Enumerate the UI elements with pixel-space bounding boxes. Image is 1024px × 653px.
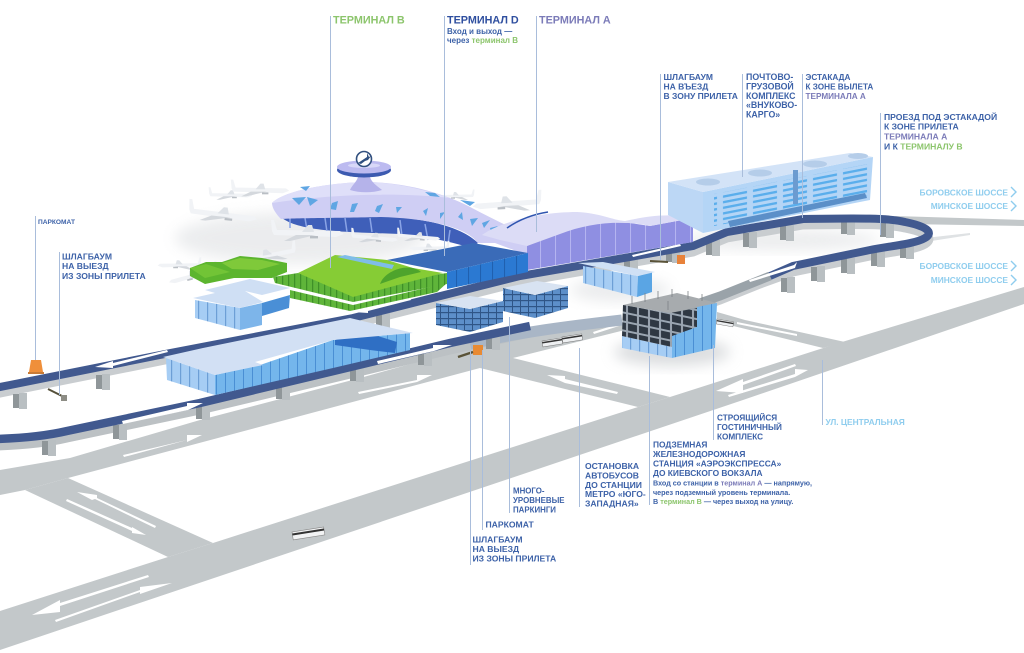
tower — [337, 160, 391, 192]
label: exit barrier bottom: ИЗ ЗОНЫ ПРИЛЕТА — [472, 554, 556, 564]
label: cargo complex: КОМПЛЕКС — [746, 91, 796, 101]
parking meter and barrier: near arrivals — [458, 345, 483, 357]
label: aeroexpress station: ЖЕЛЕЗНОДОРОЖНАЯ — [652, 449, 745, 459]
label: terminal D: Вход и выход — — [447, 27, 512, 36]
label: aeroexpress station — [652, 440, 812, 506]
label: multilevel parking: УРОВНЕВЫЕ — [513, 496, 565, 505]
label: terminal D — [447, 14, 519, 45]
label: departures overpass: К ЗОНЕ ВЫЛЕТА — [806, 82, 873, 92]
label: cargo complex: ПОЧТОВО- — [746, 72, 793, 82]
hotel under construction — [622, 289, 717, 358]
parking structures — [436, 281, 568, 332]
label: multilevel parking: ПАРКИНГИ — [513, 506, 556, 514]
label: terminal A: ТЕРМИНАЛ А — [539, 14, 611, 26]
label: bus stop: ОСТАНОВКА — [585, 461, 639, 471]
building: upper left pavilion — [193, 279, 290, 330]
label: highways lower: МИНСКОЕ ШОССЕ — [931, 275, 1008, 285]
barrier: left exit — [48, 389, 67, 401]
label: entry barrier: В ЗОНУ ПРИЛЕТА — [664, 91, 738, 101]
plane: apron aircraft group — [158, 180, 542, 287]
terminal D — [387, 243, 528, 289]
label: parking meter bottom: ПАРКОМАТ — [486, 520, 534, 530]
label: aeroexpress station: СТАНЦИЯ «АЭРОЭКСПРЕССА» — [653, 458, 782, 468]
label: cargo complex: «ВНУКОВО- — [746, 100, 797, 110]
label: hotel under construction: ГОСТИНИЧНЫЙ — [717, 421, 782, 432]
label: exit barrier left: НА ВЫЕЗД — [62, 261, 109, 271]
label: aeroexpress station: ПОДЗЕМНАЯ — [653, 440, 707, 450]
label: bus stop: ДО СТАНЦИИ — [585, 480, 642, 490]
label: aeroexpress station: через подземный уровень терминала. — [653, 488, 790, 497]
label: exit barrier bottom: НА ВЫЕЗД — [472, 544, 519, 554]
label: parking meter left: ПАРКОМАТ — [38, 219, 75, 226]
label: aeroexpress station: Вход со станции в терминал А — напрямую, — [653, 478, 812, 488]
label: bus stop: МЕТРО «ЮГО- — [585, 489, 646, 499]
label: highways upper: БОРОВСКОЕ ШОССЕ — [920, 188, 1008, 198]
label: hotel under construction: КОМПЛЕКС — [717, 432, 763, 442]
road network — [0, 216, 1024, 650]
label: aeroexpress station: ДО КИЕВСКОГО ВОКЗАЛА — [653, 468, 763, 478]
label: terminal B: ТЕРМИНАЛ В — [333, 14, 405, 26]
label: highways lower: БОРОВСКОЕ ШОССЕ — [920, 261, 1008, 271]
viaduct: upper road with pillars — [0, 218, 929, 409]
label: departures overpass: ЭСТАКАДА — [806, 73, 850, 82]
leader lines — [36, 16, 880, 565]
label: terminal D: ТЕРМИНАЛ D — [447, 14, 519, 26]
terminal A: saucer building and tower — [272, 152, 693, 270]
ground shadows — [175, 212, 880, 366]
label: terminal D: через терминал В — [447, 36, 518, 45]
label: bus stop: АВТОБУСОВ — [585, 470, 639, 480]
building: small blue box — [578, 262, 655, 297]
label: exit barrier left: ШЛАГБАУМ — [62, 252, 112, 262]
label: cargo complex: КАРГО» — [746, 110, 780, 120]
road markings: arrows — [32, 322, 808, 622]
label: entry barrier: ШЛАГБАУМ — [664, 72, 713, 82]
label: highways upper — [920, 187, 1016, 211]
label: hotel under construction: СТРОЯЩИЙСЯ — [717, 414, 777, 422]
label: highways lower — [920, 261, 1016, 285]
label: cargo complex: ГРУЗОВОЙ — [746, 80, 794, 92]
label: passage under overpass: ТЕРМИНАЛА А — [884, 132, 947, 142]
label: exit barrier bottom: ШЛАГБАУМ — [472, 534, 522, 544]
cargo complex — [668, 153, 873, 233]
label: passage under overpass: ПРОЕЗД ПОД ЭСТАКАДОЙ — [884, 112, 997, 122]
label: aeroexpress station: В терминал В — через выход на улицу. — [653, 497, 793, 506]
terminal B: main building — [273, 255, 447, 311]
parking meter: left — [28, 360, 44, 374]
label: passage under overpass: И К ТЕРМИНАЛУ В — [884, 142, 963, 152]
icon: airport logo — [356, 152, 372, 166]
label: multilevel parking: МНОГО- — [513, 486, 545, 496]
terminal B: pier — [190, 256, 287, 284]
label: highways upper: МИНСКОЕ ШОССЕ — [931, 201, 1008, 211]
label: bus stop: ЗАПАДНАЯ» — [585, 498, 639, 508]
label: central street: УЛ. ЦЕНТРАЛЬНАЯ — [826, 417, 905, 427]
label: departures overpass: ТЕРМИНАЛА А — [806, 92, 866, 101]
viaduct: lower road with pillars — [0, 320, 622, 456]
terminal A: arched hall — [482, 212, 693, 270]
parking meter and barrier: entry — [650, 255, 685, 264]
buses — [292, 319, 734, 540]
label: exit barrier left: ИЗ ЗОНЫ ПРИЛЕТА — [62, 271, 146, 281]
label: passage under overpass: К ЗОНЕ ПРИЛЕТА — [884, 122, 959, 132]
plane: parked at gates — [271, 220, 449, 252]
label: entry barrier: НА ВЪЕЗД — [664, 82, 708, 92]
building: arrivals hall — [163, 318, 413, 395]
